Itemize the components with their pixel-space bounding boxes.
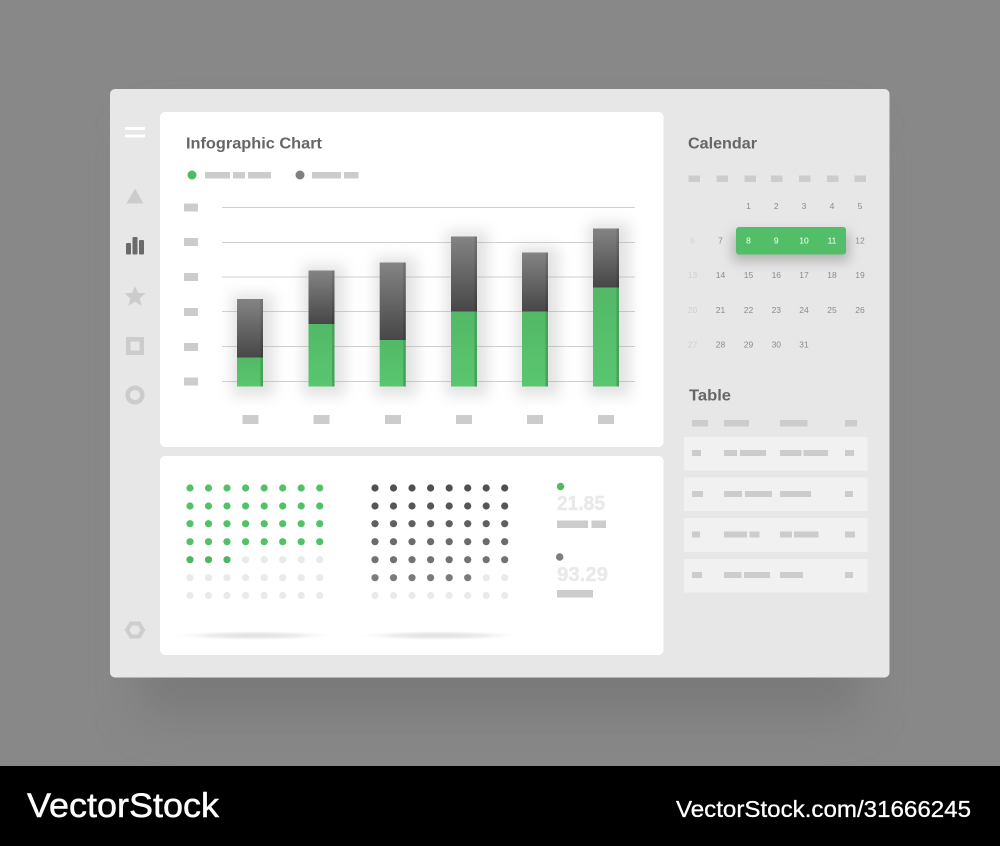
- calendar days: 28: [716, 340, 725, 350]
- calendar days: 23: [772, 305, 781, 315]
- calendar days: 27: [688, 340, 697, 350]
- calendar days: 20: [688, 305, 697, 315]
- x axis labels: [242, 415, 614, 424]
- sidebar navigation: [124, 127, 146, 636]
- calendar days: 29: [744, 340, 753, 350]
- heading: chart title: Infographic Chart: [186, 136, 323, 152]
- calendar days: 1: [746, 201, 751, 211]
- calendar days: 6: [690, 236, 695, 246]
- floor shadows under matrices: [168, 630, 525, 640]
- bar 5: [522, 252, 548, 386]
- calendar days: [688, 201, 865, 350]
- stat: 93.29: 93.29: [557, 564, 608, 586]
- bar 3: [380, 262, 406, 386]
- calendar days: 17: [799, 270, 809, 280]
- calendar days: 15: [744, 270, 753, 280]
- panel: dot matrices and stats: [160, 456, 664, 655]
- calendar days: 3: [802, 201, 807, 211]
- calendar days: 19: [855, 270, 865, 280]
- bar 4: [451, 236, 477, 386]
- dot matrix: green: [186, 484, 323, 599]
- calendar days: 10: [799, 236, 809, 246]
- table header: [692, 420, 857, 426]
- calendar days: 7: [718, 236, 723, 246]
- stat: 21.85: 21.85: [557, 493, 605, 515]
- calendar days: 16: [772, 270, 781, 280]
- table row 4: [684, 559, 868, 592]
- panel: infographic chart: [160, 112, 664, 447]
- dashboard card shadow: [140, 130, 860, 715]
- calendar days: 2: [774, 201, 779, 211]
- calendar days: 13: [688, 270, 697, 280]
- icon: menu: [125, 127, 145, 138]
- stat: 93.29: [556, 553, 608, 598]
- calendar days: 18: [827, 270, 837, 280]
- calendar days: 9: [774, 236, 779, 246]
- calendar days: 26: [855, 305, 865, 315]
- calendar days: 25: [827, 305, 837, 315]
- chart legend: [188, 170, 358, 180]
- calendar days: 30: [772, 340, 781, 350]
- bar 6: [593, 228, 619, 386]
- calendar days: 5: [858, 201, 863, 211]
- footer image id: VectorStock.com/31666245: [676, 796, 971, 822]
- y axis labels: [184, 204, 198, 386]
- icon: bar chart: [126, 237, 144, 254]
- panel: table: [684, 388, 868, 592]
- footer bar: [0, 766, 1000, 846]
- bar 1: [237, 299, 263, 386]
- table row 2: [684, 478, 868, 511]
- footer brand: VectorStock: [27, 787, 220, 825]
- icon: square: [128, 339, 142, 353]
- table row 3: [684, 518, 868, 552]
- calendar days: 21: [716, 305, 725, 315]
- icon: hexagon: [127, 624, 143, 636]
- calendar days: 22: [744, 305, 753, 315]
- stat: 21.85: [557, 483, 606, 528]
- calendar days: 31: [799, 340, 809, 350]
- icon: circle: [128, 388, 142, 402]
- dot matrix: grey: [371, 484, 508, 599]
- selected range shadow: [733, 233, 849, 261]
- icon: star: [124, 286, 146, 306]
- calendar days: 12: [855, 236, 865, 246]
- bar 2: [308, 270, 334, 386]
- calendar days: 14: [716, 270, 725, 280]
- heading: table: Table: [689, 388, 731, 404]
- table row 1: [684, 437, 868, 470]
- dashboard card: [110, 89, 890, 678]
- calendar days: 11: [828, 236, 837, 246]
- weekday labels: [688, 176, 866, 182]
- selected date range: [736, 227, 846, 254]
- bar chart: [184, 204, 635, 424]
- icon: triangle: [126, 188, 144, 204]
- heading: calendar: Calendar: [688, 136, 757, 152]
- calendar days: 4: [830, 201, 835, 211]
- panel: calendar: [688, 136, 866, 350]
- calendar days: 8: [746, 236, 751, 246]
- bar shadows: [232, 223, 630, 396]
- calendar days: 24: [799, 305, 809, 315]
